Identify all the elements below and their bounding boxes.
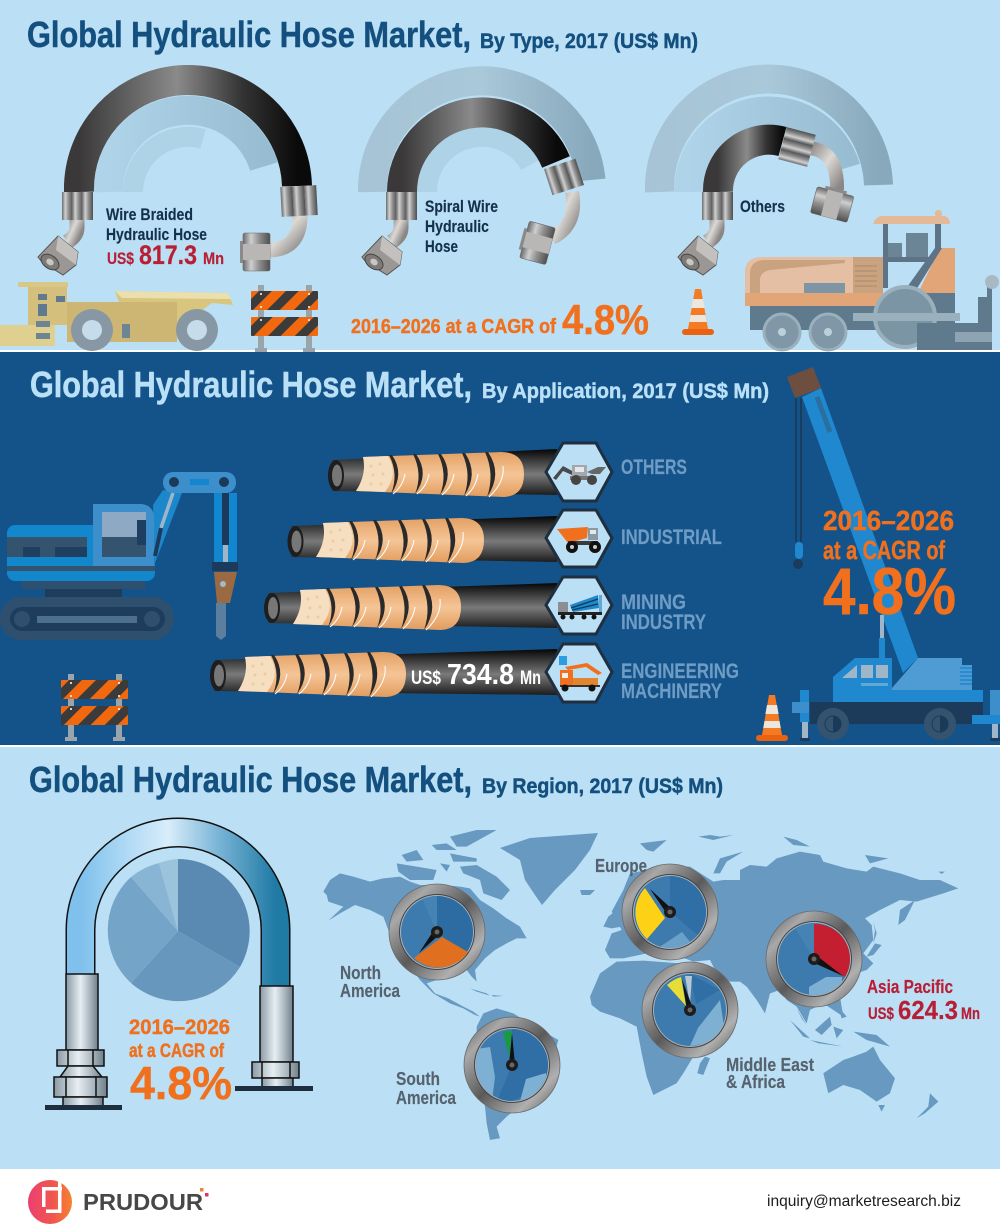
chart: spiral wire hose	[362, 81, 591, 275]
callout: cagr application: 2016–2026	[823, 505, 954, 536]
title: by application: By Application, 2017 (US$ Mn)	[482, 380, 769, 403]
label: engineering machinery value: US$	[411, 668, 441, 689]
label: asia pacific value	[867, 977, 980, 1025]
callout: cagr application: at a CAGR of	[823, 535, 945, 565]
label: others: OTHERS	[621, 456, 687, 479]
label: spiral wire: Hydraulic	[425, 217, 489, 236]
callout: cagr application	[823, 505, 956, 628]
chart: wire braided hose	[38, 80, 318, 275]
label: wire braided value: 817.3	[139, 240, 197, 270]
icon: backhoe hexagon	[546, 443, 612, 501]
gauge: north america	[389, 884, 485, 980]
label: wire braided value: Wire Braided	[106, 205, 193, 224]
label: engineering machinery: ENGINEERING	[621, 660, 739, 683]
icon: dump truck hexagon	[546, 510, 612, 567]
panel: by application background	[0, 352, 1000, 745]
label: mining industry: MINING	[621, 591, 686, 614]
icon: road paver	[745, 210, 999, 350]
chart: u-shaped hose with pie	[45, 832, 313, 1110]
label: north america: America	[340, 981, 401, 1001]
label: engineering machinery: MACHINERY	[621, 680, 722, 703]
chart: mining industry hose bar	[264, 577, 706, 634]
chart: engineering machinery hose bar	[210, 644, 739, 703]
label: asia pacific value: US$	[868, 1004, 894, 1023]
label: wire braided value: Hydraulic Hose	[106, 225, 207, 244]
callout: cagr type	[351, 296, 649, 343]
label: wire braided value: US$	[107, 249, 134, 268]
icon: traffic cone	[682, 289, 714, 335]
chart: industrial hose bar	[288, 510, 722, 567]
icon: aerial truck hexagon	[546, 644, 612, 702]
icon: mining truck	[0, 282, 233, 351]
callout: cagr type: 4.8%	[562, 296, 649, 343]
icon: road barrier dark	[61, 674, 128, 741]
label: north america: North	[340, 963, 381, 983]
label: middle east and africa: & Africa	[726, 1072, 786, 1092]
label: spiral wire: Spiral Wire	[425, 197, 498, 216]
callout: cagr region: 2016–2026	[129, 1016, 230, 1039]
chart: others hose bar	[328, 443, 687, 501]
label: engineering machinery value	[411, 659, 541, 691]
gauge: europe	[622, 864, 718, 960]
pie chart: regional share	[108, 859, 250, 1001]
callout: cagr region: 4.8%	[130, 1057, 232, 1109]
panel: by region background	[0, 747, 1000, 1169]
label: asia pacific value: 624.3	[898, 995, 958, 1025]
title: by region: Global Hydraulic Hose Market,	[29, 759, 472, 800]
label: wire braided value	[106, 205, 224, 270]
icon: excavator with breaker	[0, 472, 238, 640]
label: middle east and africa: Middle East	[726, 1055, 814, 1075]
label: asia pacific value: Asia Pacific	[867, 977, 953, 997]
label: europe: Europe	[595, 856, 647, 876]
footer: logo: PRUDOUR	[83, 1189, 203, 1215]
title: by type: Global Hydraulic Hose Market,	[27, 14, 471, 55]
callout: cagr type: 2016–2026 at a CAGR of	[351, 316, 556, 338]
title: by application: Global Hydraulic Hose Market,	[30, 364, 472, 405]
panel: by type background	[0, 0, 1000, 350]
label: mining industry: INDUSTRY	[621, 611, 706, 634]
gauge: south america	[464, 1017, 560, 1113]
label: spiral wire: Hose	[425, 237, 458, 256]
footer: logo	[28, 1180, 208, 1224]
icon: mobile crane	[787, 367, 1000, 741]
label: wire braided value: Mn	[203, 249, 224, 268]
footer: contact email: inquiry@marketresearch.biz	[767, 1193, 961, 1210]
label: south america: South	[396, 1069, 440, 1089]
callout: cagr application: 4.8%	[823, 554, 956, 628]
map: world	[323, 830, 958, 1140]
callout: cagr region	[129, 1016, 232, 1109]
chart: others hose	[659, 79, 878, 275]
label: engineering machinery value: 734.8	[447, 659, 514, 691]
label: south america: America	[396, 1088, 457, 1108]
label: industrial: INDUSTRIAL	[621, 526, 722, 549]
title: by type: By Type, 2017 (US$ Mn)	[480, 30, 698, 53]
label: asia pacific value: Mn	[961, 1004, 980, 1023]
label: engineering machinery value: Mn	[520, 668, 541, 689]
callout: cagr region: at a CAGR of	[129, 1041, 225, 1062]
icon: road barrier	[251, 285, 318, 352]
icon: traffic cone dark	[756, 695, 788, 741]
title: by region: By Region, 2017 (US$ Mn)	[482, 775, 723, 798]
label: others: Others	[740, 197, 785, 216]
gauge: asia pacific	[766, 911, 862, 1007]
gauge: middle east and africa	[642, 962, 738, 1058]
icon: mixer hexagon	[546, 577, 612, 634]
